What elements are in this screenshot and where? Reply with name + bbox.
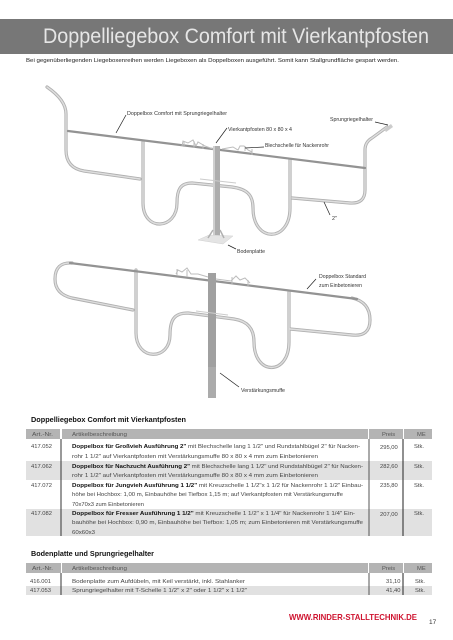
page number: 17 bbox=[429, 619, 437, 626]
table header: ME bbox=[417, 432, 426, 438]
row 417.072: Doppelbox für Jungvieh Ausführung 1 1/2" mit Kreuzschelle 1 1/2"x 1 1/2 für Nackenrohr 1 1/2" Einbau- bbox=[72, 483, 363, 489]
row 417.072: 235,80 bbox=[380, 483, 398, 489]
label: Verstaerkungsmuffe: Verstärkungsmuffe bbox=[241, 388, 285, 394]
row 416.001 bbox=[30, 579, 425, 585]
row 417.052: rohr 1 1/2" auf Vierkantpfosten mit Verstärkungsmuffe 80 x 80 x 4 mm zum Einbetonieren bbox=[72, 454, 318, 460]
diagram: Doppelbox Comfort with Sprungriegelhalter bbox=[47, 87, 393, 244]
row 417.053: Sprungriegelhalter mit T-Schelle 1 1/2" x 2" oder 1 1/2" x 1 1/2" bbox=[72, 588, 247, 594]
row 417.072: höhe bei Hochbox: 1,00 m, Einbauhöhe bei Tiefbox 1,15 m; auf Vierkantpfosten mit Verstärkungsmuffe bbox=[72, 492, 343, 498]
row 417.082: 207,00 bbox=[380, 512, 398, 518]
row 417.062 bbox=[31, 464, 424, 479]
label: Verstaerkungsmuffe bbox=[220, 373, 285, 394]
table header bbox=[26, 429, 432, 439]
table: Bodenplatte und Sprungriegelhalter bbox=[26, 563, 432, 595]
table header: Art.-Nr. bbox=[32, 432, 53, 438]
icon: Sprungriegelhalter clamp bbox=[384, 124, 393, 132]
row 417.062: 417.062 bbox=[31, 464, 52, 470]
label: Bodenplatte bbox=[228, 245, 265, 255]
row 417.072: 70x70x3 zum Einbetonieren bbox=[72, 502, 144, 508]
label: Bodenplatte: Bodenplatte bbox=[237, 249, 265, 255]
row 417.082: 60x60x3 bbox=[72, 530, 95, 536]
row 417.072: 417.072 bbox=[31, 483, 52, 489]
row 417.052 bbox=[31, 444, 424, 460]
post bbox=[213, 146, 220, 238]
label: Blechschelle: Blechschelle für Nackenrohr bbox=[265, 143, 329, 149]
neck rail clamps bbox=[182, 140, 252, 155]
label: 2 inch bbox=[324, 202, 337, 222]
row 416.001: 416.001 bbox=[30, 579, 51, 585]
table header: Preis bbox=[382, 432, 395, 438]
title band: Doppelliegebox Comfort mit Vierkantpfosten bbox=[43, 24, 429, 48]
label: Doppelbox Comfort mit Sprungriegelhalter bbox=[116, 111, 227, 133]
table header bbox=[26, 563, 432, 573]
website url: WWW.RINDER-STALLTECHNIK.DE bbox=[289, 612, 417, 622]
row 416.001: 31,10 bbox=[386, 579, 401, 585]
row 417.062: Stk. bbox=[414, 464, 424, 470]
table header: Art.-Nr. bbox=[32, 566, 53, 572]
row 417.053: Stk. bbox=[415, 588, 425, 594]
row 417.052: 295,00 bbox=[380, 445, 398, 451]
row 417.062: rohr 1 1/2" auf Vierkantpfosten mit Verstärkungsmuffe 80 x 80 x 4 mm zum Einbetonieren bbox=[72, 473, 318, 479]
label: Vierkantpfosten: Vierkantpfosten 80 x 80 x 4 bbox=[228, 127, 292, 133]
table header: ME bbox=[417, 566, 426, 572]
row 417.082: Doppelbox für Fresser Ausführung 1 1/2" mit Kreuzschelle 1 1/2" x 1 1/4" für Nackenrohr 1 1/4" Ein- bbox=[72, 511, 355, 517]
row 417.062: Doppelbox für Nachzucht Ausführung 2" mit Blechschelle lang 1 1/2" und Rundstahlbügel 2" für Nacken- bbox=[72, 464, 363, 470]
row 417.052: 417.052 bbox=[31, 444, 52, 450]
row 417.072: Stk. bbox=[414, 483, 424, 489]
label: Doppelbox Comfort mit Sprungriegelhalter: Doppelbox Comfort mit Sprungriegelhalter bbox=[127, 111, 227, 117]
row 417.052: Stk. bbox=[414, 444, 424, 450]
base plate bbox=[198, 235, 233, 244]
neck rail clamps bbox=[176, 268, 250, 286]
label: Sprungriegelhalter: Sprungriegelhalter bbox=[330, 117, 373, 123]
diagram: Doppelbox Standard bbox=[55, 263, 370, 398]
row 417.072 bbox=[31, 483, 424, 508]
heading: table 1: Doppelliegebox Comfort mit Vierkantpfosten bbox=[31, 415, 186, 424]
row 417.082: bauhöhe bei Hochbox: 0,90 m, Einbauhöhe bei Tiefbox: 1,05 m; zum Einbetonieren mit Verstärkungsmuffe bbox=[72, 520, 363, 526]
row 417.082 bbox=[31, 511, 424, 536]
row 417.082: Stk. bbox=[414, 511, 424, 517]
label: 2 inch: 2" bbox=[332, 216, 337, 222]
table header: Artikelbeschreibung bbox=[72, 432, 127, 438]
row 416.001: Bodenplatte zum Aufdübeln, mit Keil verstärkt, inkl. Stahlanker bbox=[72, 579, 245, 585]
label: Doppelbox Standard: Doppelbox Standard bbox=[319, 274, 366, 280]
row 417.082: 417.082 bbox=[31, 511, 52, 517]
row 417.052: Doppelbox für Großvieh Ausführung 2" mit Blechschelle lang 1 1/2" und Rundstahlbügel 2" für Nacken- bbox=[72, 444, 360, 450]
row 416.001: Stk. bbox=[415, 579, 425, 585]
title band bbox=[0, 19, 453, 54]
heading: table 2: Bodenplatte und Sprungriegelhalter bbox=[31, 549, 154, 558]
table header: Artikelbeschreibung bbox=[72, 566, 127, 572]
table header: Preis bbox=[382, 566, 395, 572]
post bbox=[208, 273, 216, 398]
label: Doppelbox Standard bbox=[307, 274, 366, 289]
label: Doppelbox Standard: zum Einbetonieren bbox=[319, 283, 362, 289]
row 417.062: 282,60 bbox=[380, 464, 398, 470]
row 417.053: 41,40 bbox=[386, 588, 401, 594]
label: Sprungriegelhalter bbox=[330, 117, 388, 125]
label: Vierkantpfosten bbox=[216, 127, 292, 143]
intro text: Bei gegenüberliegenden Liegeboxenreihen werden Liegeboxen als Doppelboxen ausgeführt. Somit kann Stallgrundfläche gespart werden. bbox=[26, 58, 399, 64]
row 417.053 bbox=[30, 588, 425, 594]
row 417.053: 417.053 bbox=[30, 588, 51, 594]
table: Doppelliegebox prices bbox=[26, 429, 432, 536]
